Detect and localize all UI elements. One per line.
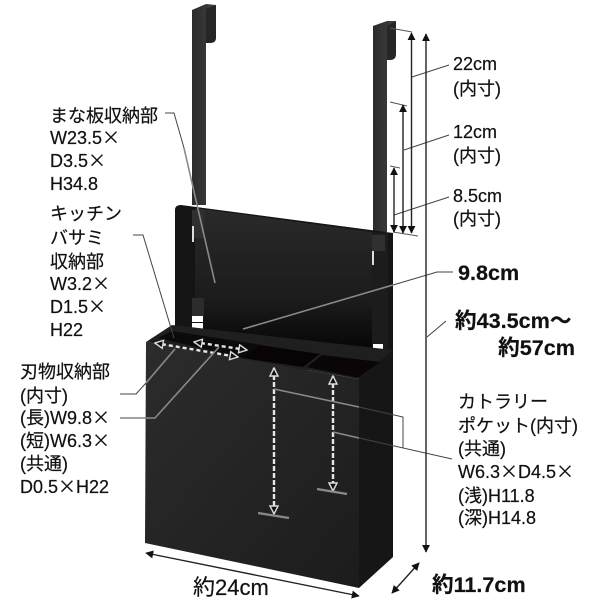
label: cutting board storage: H34.8 xyxy=(50,174,98,194)
label: total height: 約43.5cm～ xyxy=(455,308,571,333)
label: hook 8.5cm: (内寸) xyxy=(453,209,501,229)
label: width: 約24cm xyxy=(193,575,269,600)
label: cutlery pocket: (深)H14.8 xyxy=(458,508,536,528)
width arrow xyxy=(146,553,359,596)
label: hook 8.5cm: 8.5cm xyxy=(453,186,502,206)
label: cutting board storage: まな板収納部 xyxy=(50,106,158,126)
depth arrow xyxy=(392,563,419,593)
label: cutting board storage xyxy=(50,106,158,194)
label: kitchen scissors storage: バサミ xyxy=(50,228,104,248)
label: cutlery pocket: (浅)H11.8 xyxy=(458,486,535,506)
label: hook 22cm xyxy=(453,54,501,99)
label: total height xyxy=(455,308,575,360)
label: knife storage xyxy=(20,362,110,499)
panel clips and slots xyxy=(192,210,385,358)
label: cutting board storage: D3.5× xyxy=(50,147,106,173)
label: hook 12cm: 12cm xyxy=(453,122,497,142)
label: knife storage: (内寸) xyxy=(20,386,68,406)
label: cutlery pocket: カトラリー xyxy=(458,392,548,412)
label: kitchen scissors storage: H22 xyxy=(50,320,83,340)
label: kitchen scissors storage: W3.2× xyxy=(50,270,110,296)
label: 9.8cm: 9.8cm xyxy=(458,260,519,285)
label: cutlery pocket: W6.3×D4.5× xyxy=(458,458,574,484)
label: depth: 約11.7cm xyxy=(432,572,526,597)
left hanging hook xyxy=(192,4,216,205)
label: hook 8.5cm xyxy=(453,186,502,229)
label: hook 22cm: 22cm xyxy=(453,54,497,74)
label: kitchen scissors storage: 収納部 xyxy=(50,252,104,272)
label: cutlery pocket xyxy=(458,392,578,528)
label: cutting board storage: W23.5× xyxy=(50,124,120,150)
label: knife storage: (短)W6.3× xyxy=(20,427,110,453)
knife slot dimension arrows xyxy=(155,342,247,357)
label: kitchen scissors storage: キッチン xyxy=(50,204,122,224)
label: hook 12cm: (内寸) xyxy=(453,146,501,166)
storage box top xyxy=(146,325,393,379)
back panel frame xyxy=(175,205,393,588)
label: knife storage: 刃物収納部 xyxy=(20,362,110,382)
label: knife storage: (共通) xyxy=(20,454,68,474)
right hanging hook xyxy=(373,21,396,232)
label: knife storage: (長)W9.8× xyxy=(20,404,110,430)
leader lines xyxy=(120,65,453,459)
label: cutlery pocket: (共通) xyxy=(458,439,506,459)
cutlery pocket depth arrows xyxy=(258,368,347,518)
label: knife storage: D0.5×H22 xyxy=(20,473,109,499)
cutting board panel xyxy=(195,208,372,352)
label: kitchen scissors storage xyxy=(50,204,122,340)
label: total height: 約57cm xyxy=(498,335,575,360)
height dimension arrows xyxy=(390,28,426,552)
label: kitchen scissors storage: D1.5× xyxy=(50,293,106,319)
label: hook 22cm: (内寸) xyxy=(453,79,501,99)
storage box front xyxy=(145,342,359,588)
label: cutlery pocket: ポケット(内寸) xyxy=(458,416,578,436)
product: kitchen rack xyxy=(145,4,396,588)
label: hook 12cm xyxy=(453,122,501,166)
